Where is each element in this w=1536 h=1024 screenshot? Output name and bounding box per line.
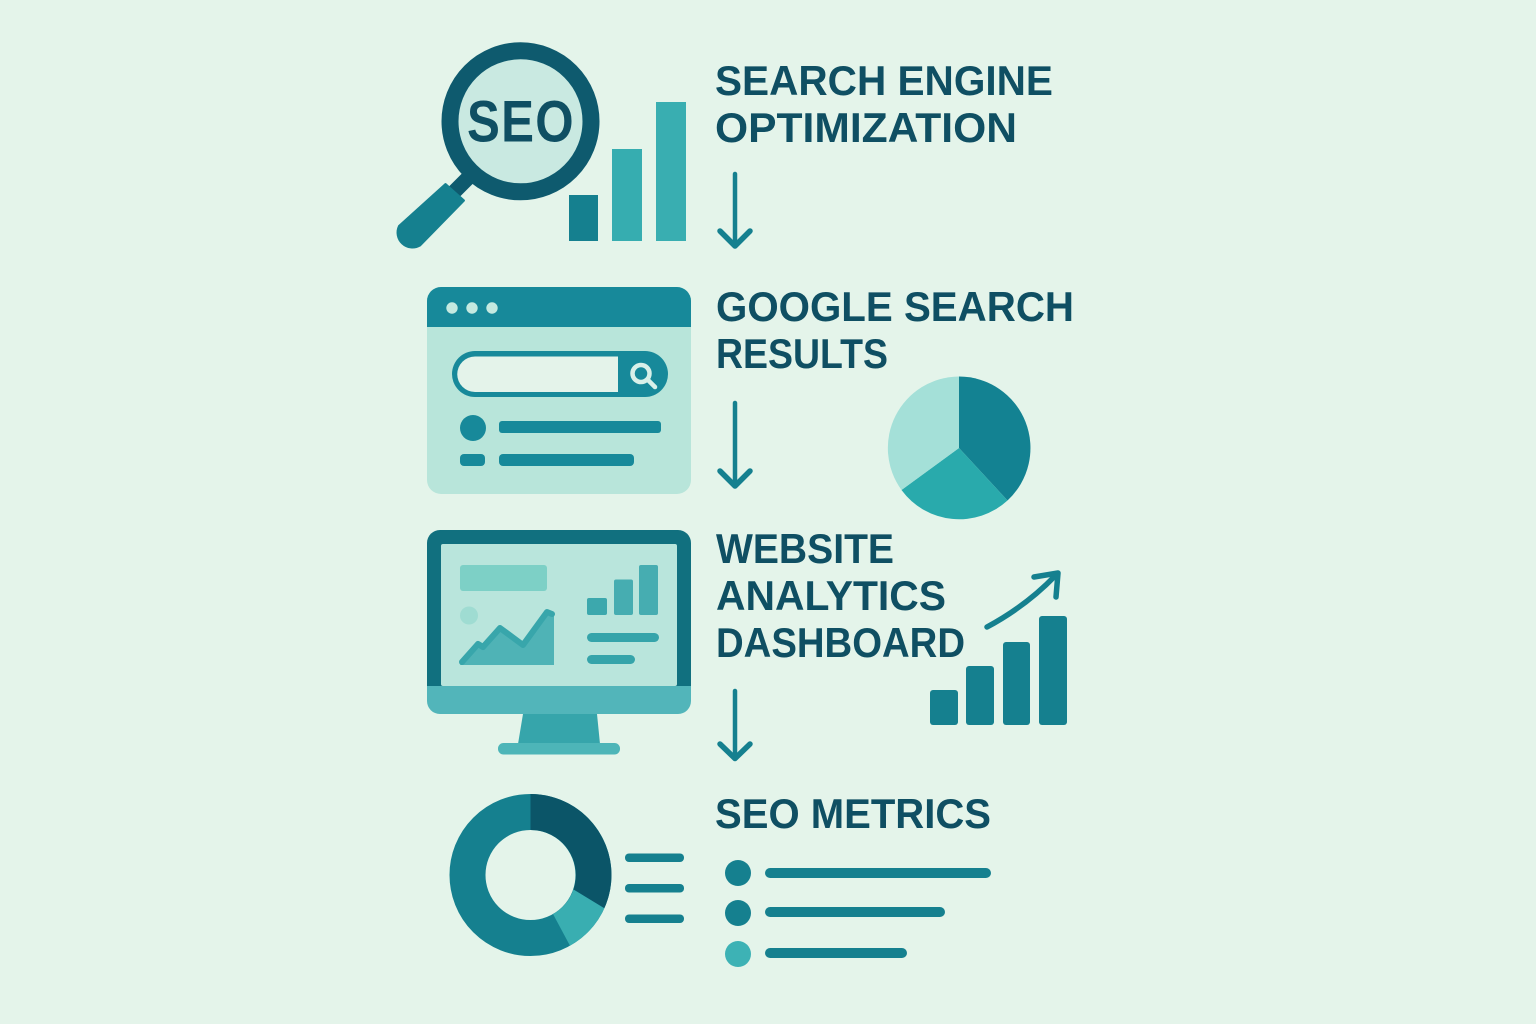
arrow: step 1 to 2 (720, 174, 750, 246)
icon: analytics monitor (427, 530, 691, 754)
icon: rising bar chart (569, 102, 686, 241)
arrow: step 2 to 3 (720, 403, 750, 486)
icon: SEO magnifying glass: SEO (467, 90, 575, 154)
heading: website analytics dashboard: ANALYTICS (716, 572, 946, 619)
icon: browser search window (427, 287, 691, 494)
heading: SEO metrics: SEO METRICS (715, 790, 991, 837)
icon: donut legend lines (625, 854, 684, 923)
icon: growth bars with arrow (930, 573, 1067, 725)
arrow: step 3 to 4 (720, 691, 750, 758)
heading: search engine optimization (715, 57, 1053, 151)
icon: donut chart (468, 794, 611, 946)
heading: google search results: GOOGLE SEARCH (716, 283, 1074, 330)
heading: search engine optimization: SEARCH ENGINE (715, 57, 1053, 104)
heading: google search results (716, 283, 1074, 377)
heading: website analytics dashboard: DASHBOARD (716, 619, 965, 666)
list: metrics rows (725, 860, 991, 967)
icon: pie chart (888, 376, 1030, 519)
heading: google search results: RESULTS (716, 330, 888, 377)
heading: website analytics dashboard: WEBSITE (716, 525, 894, 572)
heading: search engine optimization: OPTIMIZATION (715, 104, 1017, 151)
icon: SEO magnifying glass (398, 51, 591, 247)
heading: website analytics dashboard (716, 525, 965, 666)
